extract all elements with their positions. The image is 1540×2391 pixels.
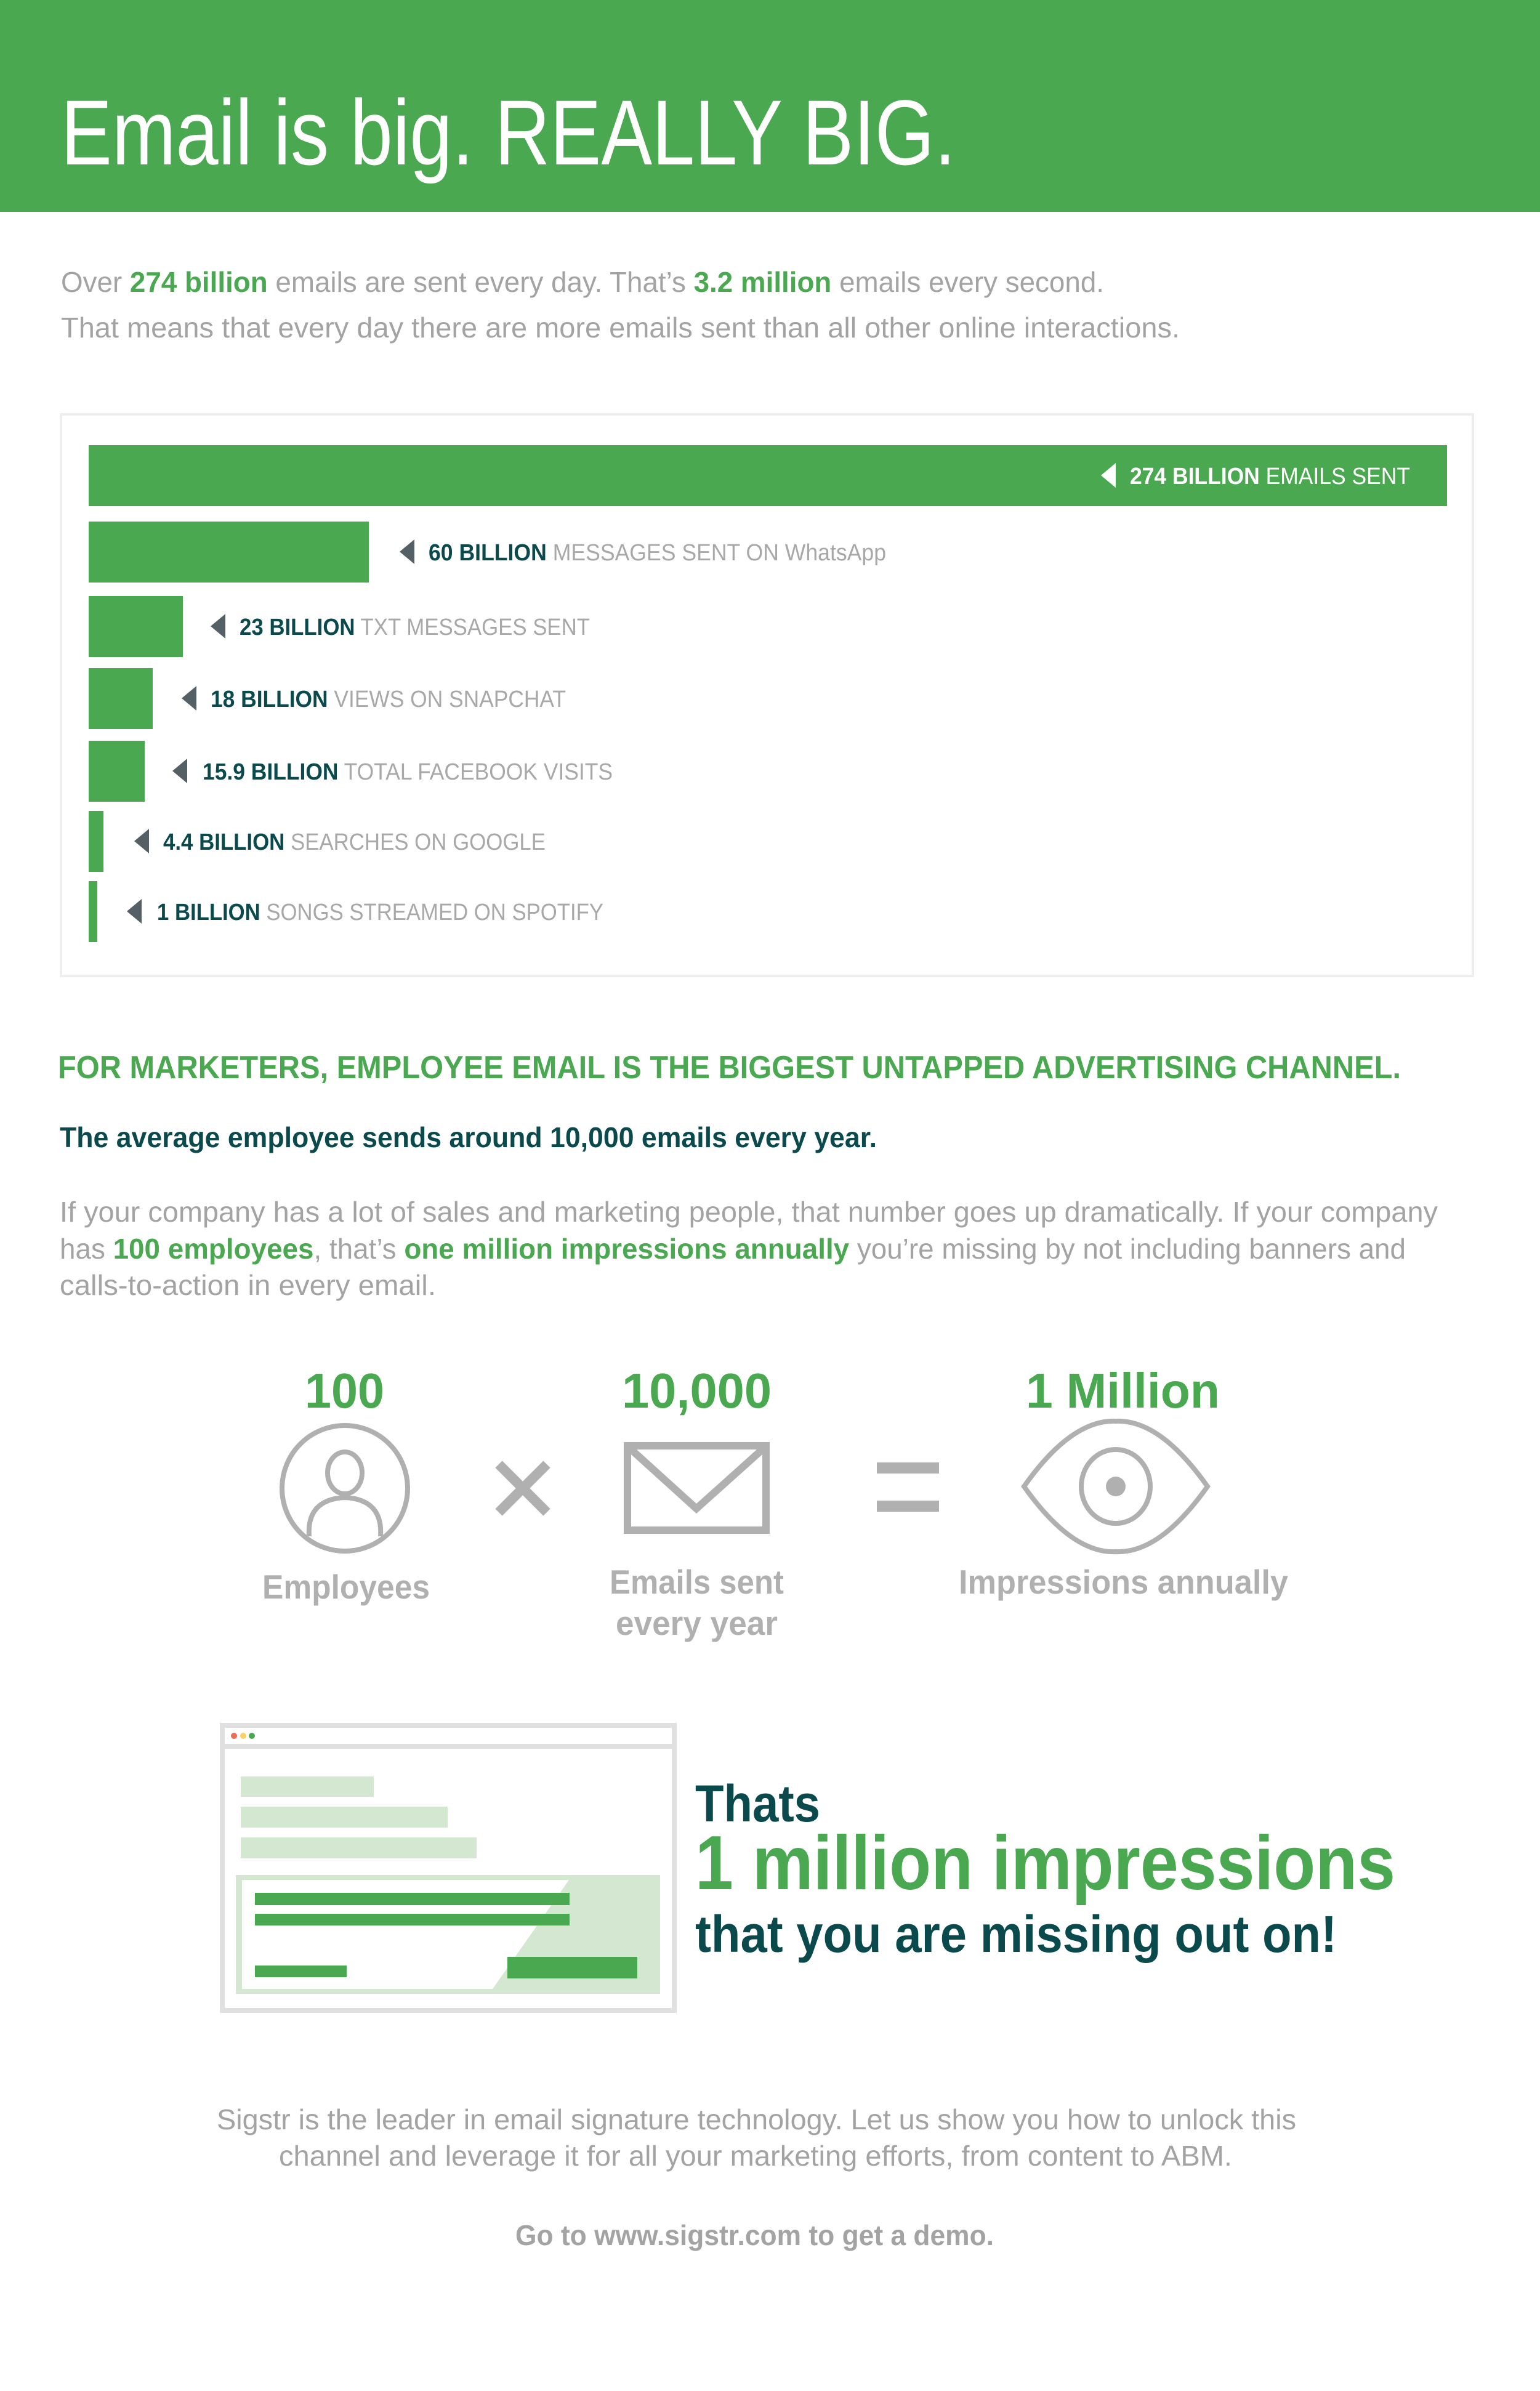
subheading: The average employee sends around 10,000 emails every year. [60, 1121, 877, 1153]
header banner [0, 0, 1540, 212]
emails item: 10,000 [622, 1363, 772, 1418]
section heading: FOR MARKETERS, EMPLOYEE EMAIL IS THE BIGGEST UNTAPPED ADVERTISING CHANNEL. [58, 1050, 1401, 1086]
paragraph: If your company has a lot of sales and marketing people, that number goes up dramatically. If your company [60, 1196, 1438, 1228]
paragraph: has 100 employees, that’s one million impressions annually you’re missing by not including banners and [60, 1233, 1406, 1265]
intro text: Over 274 billion emails are sent every day. That’s 3.2 million emails every second. [61, 266, 1104, 298]
employees item: Employees [262, 1568, 430, 1606]
bar: spotify: 1 BILLION SONGS STREAMED ON SPOTIFY [157, 900, 603, 925]
callout: 1 million impressions: that you are missing out on! [695, 1905, 1337, 1963]
bar: txt [89, 596, 590, 657]
bar: emails [89, 445, 1447, 506]
paragraph [60, 1196, 1438, 1301]
footer text: Sigstr is the leader in email signature technology. Let us show you how to unlock this [217, 2103, 1296, 2135]
bar: whatsapp [89, 522, 886, 583]
bar: txt: 23 BILLION TXT MESSAGES SENT [240, 615, 590, 640]
footer text [217, 2103, 1296, 2172]
intro text: That means that every day there are more emails sent than all other online interactions. [61, 312, 1180, 344]
bar: emails: 274 BILLION EMAILS SENT [1130, 464, 1410, 490]
bar: facebook: 15.9 BILLION TOTAL FACEBOOK VISITS [203, 759, 613, 785]
icon: envelope [627, 1446, 766, 1530]
bar: spotify [89, 881, 603, 942]
impressions item [959, 1363, 1288, 1601]
impressions item: 1 Million [1026, 1363, 1220, 1418]
bar: whatsapp: 60 BILLION MESSAGES SENT ON WhatsApp [429, 540, 886, 566]
bar chart panel [61, 414, 1473, 976]
emails item: every year [616, 1604, 778, 1642]
callout: 1 million impressions [695, 1775, 1395, 1963]
bar: facebook [89, 741, 613, 802]
bar: snapchat [89, 668, 566, 729]
browser mockup illustration [222, 1725, 674, 2010]
callout: 1 million impressions: Thats [695, 1775, 820, 1833]
employees item: 100 [305, 1363, 384, 1418]
equation [262, 1363, 1288, 1642]
callout: 1 million impressions: 1 million impressions [695, 1821, 1395, 1906]
icon: eye [1024, 1421, 1207, 1552]
bar: snapchat: 18 BILLION VIEWS ON SNAPCHAT [211, 687, 566, 712]
employees item [262, 1363, 430, 1606]
footer text: channel and leverage it for all your marketing efforts, from content to ABM. [279, 2140, 1232, 2172]
title: Email is big. REALLY BIG. [61, 81, 956, 184]
icon: multiply [499, 1464, 547, 1512]
bar: google: 4.4 BILLION SEARCHES ON GOOGLE [163, 829, 546, 855]
impressions item: Impressions annually [959, 1563, 1288, 1601]
call to action: Go to www.sigstr.com to get a demo. [515, 2219, 994, 2251]
bar: google [89, 811, 546, 872]
icon: person [282, 1425, 408, 1551]
paragraph: calls-to-action in every email. [60, 1269, 436, 1301]
emails item [610, 1363, 784, 1642]
emails item: Emails sent [610, 1563, 784, 1601]
icon: equals [877, 1462, 939, 1512]
intro text [61, 266, 1180, 344]
